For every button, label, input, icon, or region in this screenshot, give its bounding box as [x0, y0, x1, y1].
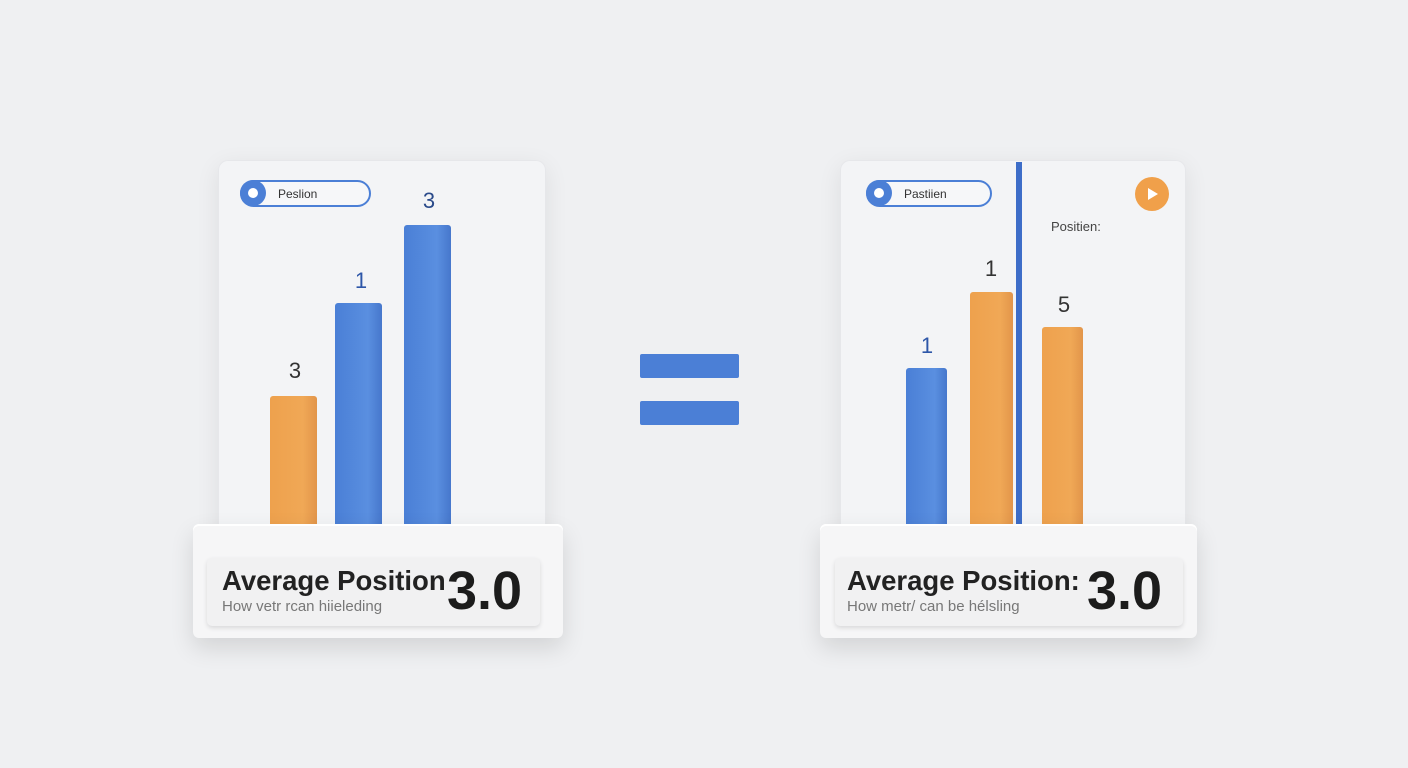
icon: orange play button — [1135, 177, 1169, 211]
text: position label: Positien: — [1051, 219, 1101, 234]
bar: orange 3 — [270, 396, 317, 526]
heading: average position: Average Position: — [847, 565, 1080, 596]
label: 3 top: 3 — [423, 188, 435, 213]
label box: left — [207, 558, 540, 626]
bar: blue 1 — [906, 368, 947, 526]
pill: left position: Peslion — [278, 187, 317, 201]
base: right — [820, 524, 1197, 638]
label: 1: 1 — [355, 268, 367, 293]
bar: orange 5 — [1042, 327, 1083, 526]
icon: equals sign — [640, 354, 739, 425]
label box: right — [835, 558, 1183, 626]
label: 3: 3 — [289, 358, 301, 383]
bar: blue 3 — [404, 225, 451, 526]
value: 3.0: 3.0 — [447, 561, 522, 621]
pill: right position: Pastiien — [904, 187, 947, 201]
subtitle: How vetr rcan hiieleding — [222, 598, 382, 615]
label: 1: 1 — [985, 256, 997, 281]
bar: orange 1 — [970, 292, 1013, 526]
label: 1 blue: 1 — [921, 333, 933, 358]
label: 5: 5 — [1058, 292, 1070, 317]
heading: average position: Average Position — [222, 565, 446, 596]
pill: left position — [240, 180, 371, 207]
base: left — [193, 524, 563, 638]
card: right — [840, 160, 1186, 540]
panel: right chart — [814, 160, 1204, 654]
divider line: blue vertical — [1016, 162, 1022, 540]
value: 3.0: 3.0 — [1087, 561, 1162, 621]
pill: right position — [866, 180, 992, 207]
panel: left chart — [186, 160, 570, 654]
subtitle: How metr/ can be hélsling — [847, 598, 1020, 615]
bar: blue 1 — [335, 303, 382, 526]
card: left — [218, 160, 546, 540]
